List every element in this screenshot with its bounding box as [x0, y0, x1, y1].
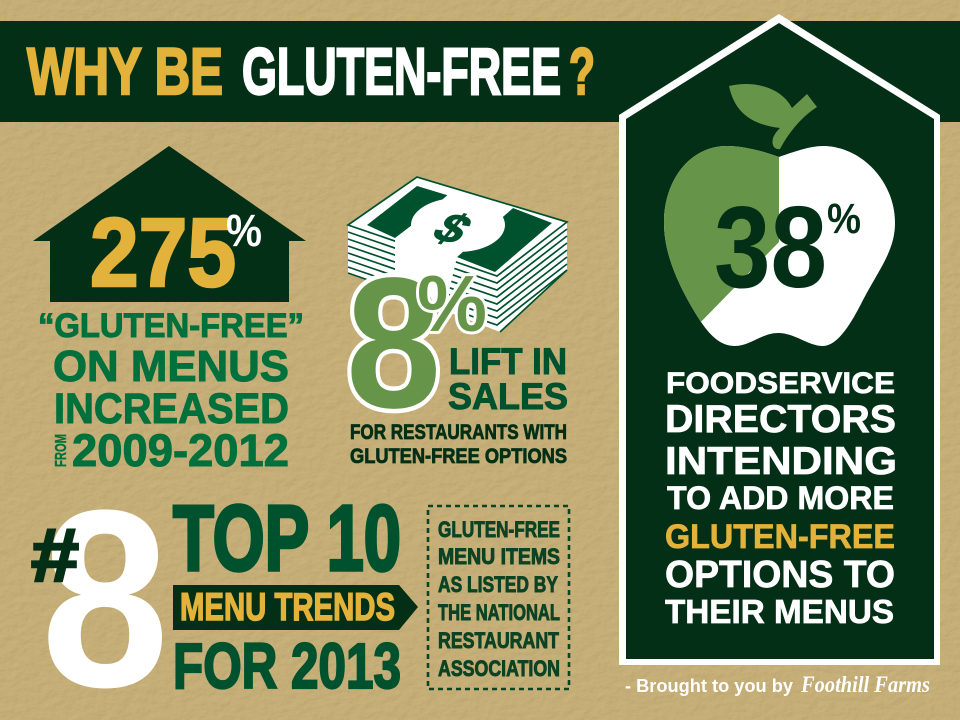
title banner [0, 21, 960, 122]
callout: national restaurant association: ASSOCIATION [438, 656, 560, 681]
icon: house [33, 146, 306, 302]
text: for restaurants: GLUTEN-FREE OPTIONS [350, 444, 567, 468]
callout: national restaurant association: RESTAURANT [438, 628, 559, 653]
stat: 275 percent: 275 [90, 198, 236, 307]
text: foodservice directors: DIRECTORS [665, 398, 896, 441]
stat: 275 percent: % [226, 205, 262, 256]
footer credit: - Brought to you by [625, 676, 793, 696]
panel: 275 percent house [33, 146, 306, 476]
panel: top 10 menu trends [31, 458, 569, 720]
text: gluten-free on menus [38, 307, 304, 476]
icon: stack of money: $ [422, 204, 483, 253]
callout: national restaurant association: MENU ITEMS [438, 544, 560, 569]
stat: 8 percent [346, 238, 487, 447]
text: lift in sales [448, 341, 568, 417]
text: for restaurants [350, 420, 567, 468]
stat: 38 percent: 38 [714, 182, 827, 312]
title: GLUTEN-FREE [242, 34, 561, 108]
icon: apple [660, 84, 900, 350]
panel: 8 percent lift [346, 177, 568, 468]
text: foodservice directors: THEIR MENUS [665, 593, 894, 630]
text: gluten-free on menus: FROM [53, 434, 70, 467]
icon: stack of money [348, 177, 567, 332]
panel: 38 percent house [619, 14, 940, 665]
text: foodservice directors [665, 367, 897, 630]
text: top 10: TOP 10 [173, 486, 401, 590]
text: gluten-free on menus: ON MENUS [53, 342, 289, 391]
title [27, 34, 595, 108]
text: foodservice directors: OPTIONS TO [665, 554, 895, 596]
text: lift in sales: LIFT IN [449, 341, 567, 382]
footer credit: Foothill Farms [800, 672, 930, 697]
title: ? [569, 34, 595, 108]
stat: 8 percent: 8 [346, 238, 441, 447]
title: WHY BE [27, 34, 223, 108]
text: for 2013: FOR 2013 [173, 630, 401, 702]
text: lift in sales: SALES [448, 376, 568, 417]
text: foodservice directors: INTENDING [665, 440, 897, 483]
callout: national restaurant association: THE NATIONAL [438, 600, 560, 625]
callout: national restaurant association [428, 506, 569, 689]
arrow: menu trends: MENU TRENDS [180, 586, 395, 629]
text: foodservice directors: GLUTEN-FREE [665, 518, 895, 556]
callout: national restaurant association: GLUTEN-FREE [438, 517, 560, 542]
text: foodservice directors: FOODSERVICE [666, 367, 895, 400]
text: gluten-free on menus: “GLUTEN-FREE” [38, 307, 304, 345]
stat: number 8: # [31, 513, 79, 597]
text: gluten-free on menus: INCREASED [54, 385, 289, 433]
stat: 38 percent: % [827, 195, 861, 243]
text: foodservice directors: TO ADD MORE [667, 480, 894, 516]
footer credit [625, 672, 930, 697]
text: for restaurants: FOR RESTAURANTS WITH [350, 420, 567, 444]
callout: national restaurant association: AS LISTED BY [438, 572, 558, 597]
text: gluten-free on menus: 2009-2012 [72, 425, 289, 476]
stat: 8 percent: % [417, 259, 487, 348]
